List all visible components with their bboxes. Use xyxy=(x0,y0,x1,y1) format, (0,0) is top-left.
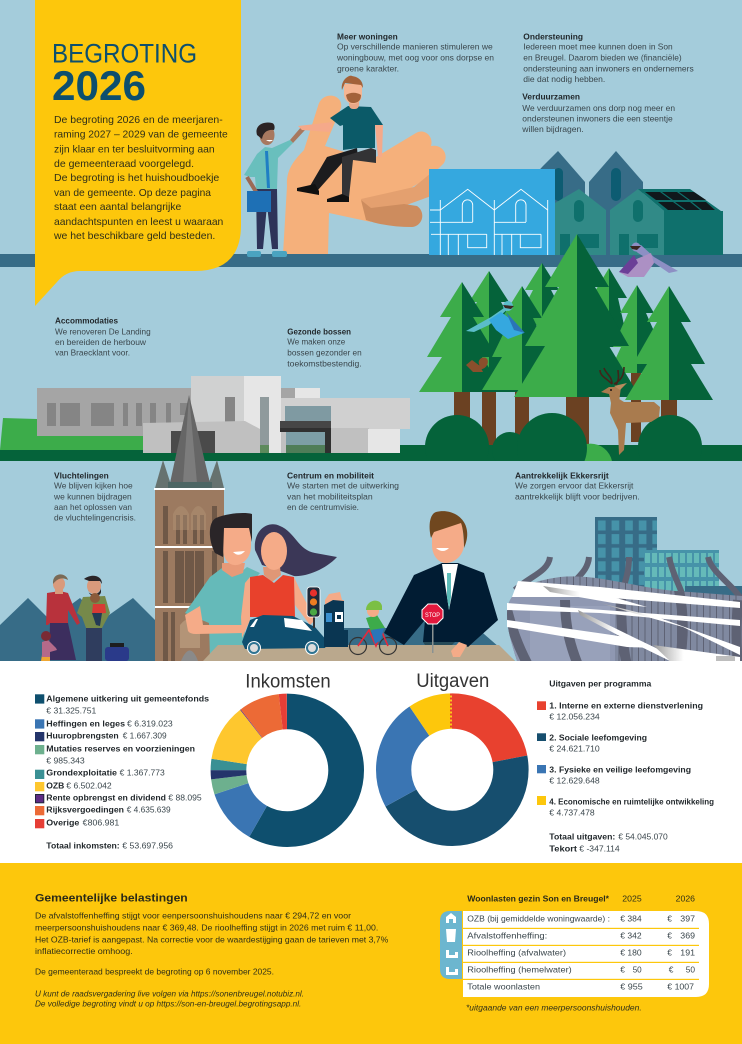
heading: Inkomsten: Inkomsten xyxy=(245,671,331,692)
small child xyxy=(41,631,57,661)
text: belastingen: U kunt de raadsvergadering live volgen via https://sonenbreugel.notubiz.nl. xyxy=(35,988,304,998)
legend: Inkomsten: € 4.635.639 xyxy=(127,805,171,815)
heading: belastingen: Gemeentelijke belastingen xyxy=(35,892,188,904)
car xyxy=(242,615,328,655)
bushes xyxy=(425,413,702,461)
child on bicycle xyxy=(350,601,396,654)
text: belastingen: De volledige begroting vindt u op https://son-en-breugel.begrotingsapp.nl. xyxy=(35,999,301,1009)
text: Meer woningen: woningbouw, met oog voor ons dorpse en xyxy=(336,53,494,63)
church tower xyxy=(154,395,225,661)
table header: Woonlasten gezin Son en Breugel* xyxy=(467,894,610,904)
text: Aantrekkelijk Ekkersrijt: aantrekkelijk blijft voor bedrijven. xyxy=(515,491,640,501)
table header xyxy=(467,894,695,904)
text: Ondersteuning: die dat nodig hebben. xyxy=(523,74,605,84)
text: Verduurzamen: We verduurzamen ons dorp nog meer en xyxy=(522,103,675,113)
mountains xyxy=(0,598,515,661)
windows xyxy=(47,403,202,426)
office buildings xyxy=(595,517,742,616)
table rows: € 180 xyxy=(620,948,642,958)
woman xyxy=(241,524,337,638)
table header: 2025 xyxy=(622,894,642,904)
tree right xyxy=(625,286,713,400)
text: Ondersteuning: ondersteuning aan inwoners en ondernemers xyxy=(523,64,694,74)
illustration: hand with two men xyxy=(244,76,446,257)
text: Gezonde bossen: We maken onze xyxy=(287,337,346,347)
text: belastingen: Het OZB-tarief is aangepast. Na correctie voor de waardestijging gaan de tarieven met 3,7% xyxy=(35,935,389,945)
stadium xyxy=(500,557,742,665)
legend: Inkomsten: € 88.095 xyxy=(168,793,202,803)
text: Aantrekkelijk Ekkersrijt xyxy=(515,470,640,501)
icon tab xyxy=(440,911,462,979)
woman xyxy=(46,574,80,660)
illustration: accommodation building xyxy=(0,376,410,461)
legend: Uitgaven: Tekort xyxy=(549,843,577,853)
text: Accommodaties: en bereiden de herbouw xyxy=(55,337,147,347)
white block xyxy=(143,376,281,453)
text: Accommodaties: We renoveren De Landing xyxy=(55,326,151,336)
intro text xyxy=(53,115,228,242)
seated man xyxy=(297,76,383,202)
text: belastingen: meerpersoonshuishoudens naar € 369,48. De rioolheffing stijgt in 2026 met ruim € 11,00. xyxy=(35,923,378,933)
donut chart: Inkomsten xyxy=(228,711,346,829)
text: Accommodaties: van Braecklant voor. xyxy=(55,348,130,358)
table rows: € xyxy=(620,965,625,975)
deficit marker on Uitgaven donut xyxy=(450,694,452,729)
legend: Inkomsten: € 6.502.042 xyxy=(66,781,112,791)
background trees xyxy=(446,263,665,392)
white bands xyxy=(507,581,740,661)
intro text: De begroting is het huishoudboekje xyxy=(54,173,220,184)
legend: Uitgaven: 3. Fysieke en veilige leefomgeving xyxy=(549,765,691,775)
table rows: € xyxy=(669,965,674,975)
legend: Uitgaven: 4. Economische en ruimtelijke ontwikkeling xyxy=(549,796,714,806)
legend: Inkomsten: Rijksvergoedingen xyxy=(46,805,124,815)
legend: Uitgaven: € -347.114 xyxy=(579,843,620,853)
text: Centrum en mobiliteit: van het mobiliteitsplan xyxy=(287,491,373,501)
legend: Uitgaven: 2. Sociale leefomgeving xyxy=(549,732,647,742)
table rows: € xyxy=(667,914,672,924)
text: Meer woningen: Op verschillende manieren stimuleren we xyxy=(337,42,493,52)
table rows xyxy=(467,914,695,992)
intro text: we het beschikbare geld besteden. xyxy=(53,231,215,242)
text: belastingen: inflatiecorrectie omhoog. xyxy=(35,946,133,956)
text: Vluchtelingen: de vluchtelingencrisis. xyxy=(54,512,136,522)
standing man xyxy=(244,122,305,257)
legend: Inkomsten: € 1.667.309 xyxy=(123,731,167,741)
legend: Uitgaven xyxy=(537,679,714,853)
tree left xyxy=(419,282,505,392)
hand xyxy=(283,96,446,254)
table rows: € xyxy=(667,948,672,958)
legend: Uitgaven: Uitgaven per programma xyxy=(549,679,652,689)
legend: Inkomsten: € 1.367.773 xyxy=(120,768,165,778)
text: Centrum en mobiliteit: Centrum en mobiliteit xyxy=(287,470,374,480)
legend: Uitgaven: € 54.045.070 xyxy=(618,831,668,841)
tree trunks xyxy=(454,370,677,447)
bush light xyxy=(569,444,612,461)
legend: Inkomsten: € 985.343 xyxy=(46,755,85,765)
text: Meer woningen: Meer woningen xyxy=(337,31,398,41)
text: Gezonde bossen: bossen gezonder en xyxy=(287,348,362,358)
legend: Uitgaven: € 24.621.710 xyxy=(549,743,600,753)
ground strip xyxy=(0,450,395,461)
title: BEGROTING xyxy=(52,39,197,69)
intro text: staat een aantal belangrijke xyxy=(54,202,182,213)
suitcase xyxy=(105,643,129,661)
intro text: De begroting 2026 en de meerjaren- xyxy=(54,115,223,126)
text: Meer woningen xyxy=(336,31,494,74)
table rows: Rioolheffing (hemelwater) xyxy=(467,965,572,975)
table body xyxy=(463,911,709,997)
text: Gezonde bossen: toekomstbestendig. xyxy=(287,358,362,368)
intro text: van de gemeente. Op deze pagina xyxy=(54,188,211,199)
legend: Uitgaven: € 12.629.648 xyxy=(549,775,600,785)
text: Accommodaties xyxy=(55,315,151,358)
table header: 2026 xyxy=(676,894,695,904)
text: Verduurzamen: Verduurzamen xyxy=(522,92,580,102)
table rows: 191 xyxy=(680,948,695,958)
table rows: € 955 xyxy=(620,982,643,992)
man with child xyxy=(77,576,110,661)
blue bird xyxy=(466,301,525,339)
blue back houses xyxy=(530,151,643,255)
legend: Inkomsten: Mutaties reserves en voorzieningen xyxy=(46,744,195,754)
legend: Inkomsten: Grondexploitatie xyxy=(46,768,117,778)
intro text: raming 2027 – 2029 van de gemeente xyxy=(54,130,228,141)
purple bird xyxy=(619,242,678,277)
donut chart: Uitgaven xyxy=(134,506,511,828)
text: Verduurzamen: willen bijdragen. xyxy=(521,124,584,134)
text: Gezonde bossen xyxy=(287,326,362,368)
table rows: OZB (bij gemiddelde woningwaarde) : xyxy=(467,914,610,924)
text: belastingen: De gemeenteraad bespreekt de begroting op 6 november 2025. xyxy=(35,967,274,977)
table rows: Totale woonlasten xyxy=(467,982,540,992)
forest ground xyxy=(395,445,742,461)
title xyxy=(52,39,197,109)
text: Ondersteuning: en Breugel. Daarom bieden we (financiële) xyxy=(523,53,682,63)
illustration: refugees xyxy=(41,574,129,661)
legend: Inkomsten: € 6.319.023 xyxy=(127,719,173,729)
title: 2026 xyxy=(52,62,146,109)
legend: Inkomsten: OZB xyxy=(46,781,64,791)
legend: Inkomsten: € 31.325.751 xyxy=(46,705,97,715)
legend: Inkomsten: €806.981 xyxy=(83,818,120,828)
table rows: 369 xyxy=(680,931,695,941)
text: Vluchtelingen: We blijven kijken hoe xyxy=(54,480,133,490)
legend: Inkomsten xyxy=(35,694,209,851)
table rows: € xyxy=(667,931,672,941)
illustration: houses xyxy=(429,151,723,255)
footnote: *uitgaande van een meerpersoonshuishouden. xyxy=(466,1003,642,1013)
text: Ondersteuning: Ondersteuning xyxy=(523,31,583,41)
text: Aantrekkelijk Ekkersrijt: We zorgen ervoor dat Ekkersrijt xyxy=(515,480,634,490)
parking meter xyxy=(324,592,348,647)
text: Verduurzamen xyxy=(521,92,675,134)
blueprint house xyxy=(429,169,555,255)
road strip xyxy=(0,254,742,267)
illustration: forest xyxy=(395,234,742,483)
legend: Inkomsten: Overige xyxy=(46,818,80,828)
white chart panel xyxy=(0,661,742,863)
text: Centrum en mobiliteit xyxy=(287,470,399,512)
legend: Uitgaven: € 12.056.234 xyxy=(549,711,600,721)
heading: Uitgaven: Uitgaven xyxy=(416,671,489,692)
lawn xyxy=(0,418,143,450)
text: Ondersteuning xyxy=(523,31,694,84)
illustration: Ekkersrijt xyxy=(500,517,742,665)
table xyxy=(203,645,515,661)
tree middle xyxy=(482,286,562,390)
intro text: aandachtspunten en leest u waaraan xyxy=(54,217,224,228)
text: Meer woningen: groene karakter. xyxy=(337,64,399,74)
table rows: 397 xyxy=(680,914,695,924)
text: belastingen xyxy=(35,911,389,1009)
legend: Uitgaven: € 4.737.478 xyxy=(549,807,595,817)
legend: Inkomsten: Totaal inkomsten: xyxy=(46,841,120,851)
text: Centrum en mobiliteit: en de centrumvisie. xyxy=(287,502,359,512)
right wing xyxy=(280,388,410,453)
text: Ondersteuning: Iedereen moet mee kunnen doen in Son xyxy=(523,42,673,52)
text: Vluchtelingen xyxy=(53,470,136,522)
table rows: Afvalstoffenheffing: xyxy=(467,931,547,941)
table rows: € 384 xyxy=(620,914,642,924)
text: Accommodaties: Accommodaties xyxy=(55,315,118,325)
text: Vluchtelingen: we kunnen bijdragen xyxy=(53,491,132,501)
legend: Inkomsten: Algemene uitkering uit gemeentefonds xyxy=(46,694,209,704)
text: Vluchtelingen: Vluchtelingen xyxy=(54,470,109,480)
text: belastingen: De afvalstoffenheffing stijgt voor eenpersoonshuishoudens naar € 294,72 en voor xyxy=(35,911,351,921)
text: Centrum en mobiliteit: We starten met de uitwerking xyxy=(287,480,399,490)
table rows: 50 xyxy=(633,965,642,975)
panel: gemeentelijke belastingen xyxy=(0,863,742,1044)
table rows: € 342 xyxy=(620,931,642,941)
deer xyxy=(600,367,660,455)
background sky xyxy=(0,0,742,661)
man xyxy=(185,513,260,660)
legend: Inkomsten: € 53.697.956 xyxy=(122,841,173,851)
speech bubble xyxy=(35,0,241,306)
grey wing xyxy=(37,388,191,436)
text: Gezonde bossen: Gezonde bossen xyxy=(287,326,351,336)
teal front houses xyxy=(555,189,723,255)
text: Vluchtelingen: aan het oplossen van xyxy=(54,502,132,512)
businessman xyxy=(384,511,498,657)
table rows: € 1007 xyxy=(667,982,694,992)
text: Verduurzamen: ondersteunen inwoners die een steentje xyxy=(522,113,673,123)
squirrel xyxy=(466,358,487,372)
legend: Inkomsten: Huuropbrengsten xyxy=(46,731,119,741)
legend: Uitgaven: 1. Interne en externe dienstverlening xyxy=(549,700,703,710)
text: Aantrekkelijk Ekkersrijt: Aantrekkelijk Ekkersrijt xyxy=(515,470,609,480)
traffic light xyxy=(307,587,320,628)
table rows: 50 xyxy=(686,965,695,975)
table: woonlasten xyxy=(440,894,709,1013)
legend: Uitgaven: Totaal uitgaven: xyxy=(549,831,615,841)
intro text: de gemeenteraad voorgelegd. xyxy=(54,159,194,170)
stop sign xyxy=(422,604,443,653)
intro text: zijn klaar en ter besluitvorming aan xyxy=(54,144,215,155)
illustration: couple xyxy=(185,513,515,661)
legend: Inkomsten: Heffingen en leges xyxy=(46,719,125,729)
tree big xyxy=(514,234,640,397)
stop sign: STOP xyxy=(425,613,440,619)
legend: Inkomsten: Rente opbrengst en dividend xyxy=(46,793,166,803)
table rows: Rioolheffing (afvalwater) xyxy=(467,948,566,958)
